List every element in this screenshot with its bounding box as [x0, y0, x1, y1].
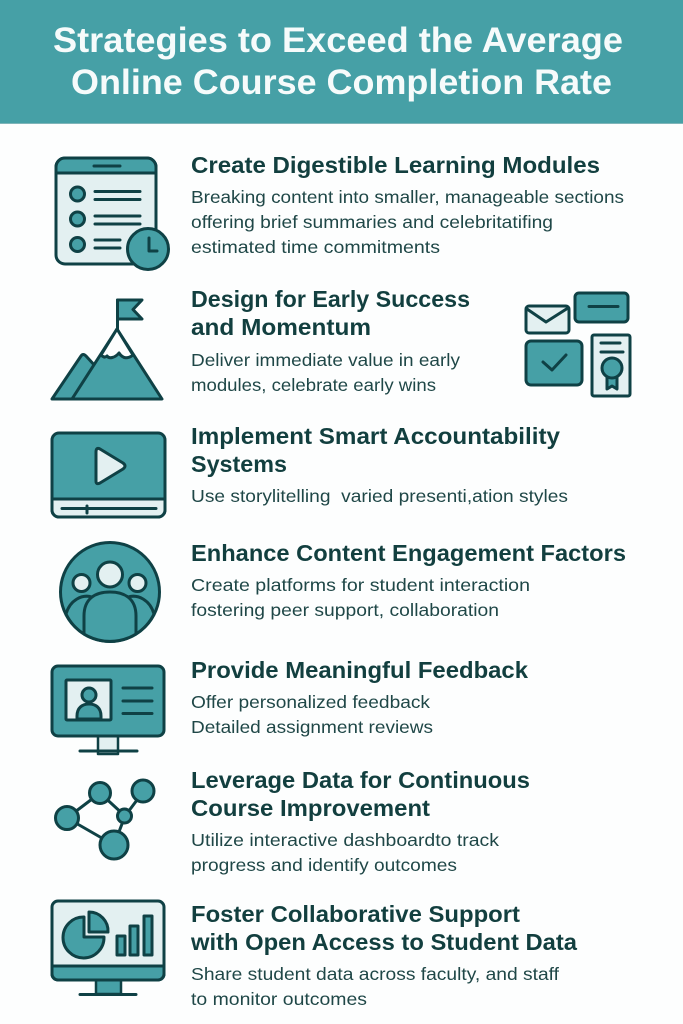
heading and text: collaborative support: Foster Collaborative Support: [191, 901, 520, 927]
heading and text: collaborative support: [190, 901, 577, 1009]
heading and text: feedback: Provide Meaningful Feedback: [191, 657, 528, 683]
icon: monitor with profile: [52, 666, 164, 754]
title banner: [0, 0, 683, 124]
heading and text: digestible modules: estimated time commitments: [191, 237, 440, 257]
heading and text: engagement: [191, 540, 626, 620]
heading and text: feedback: Detailed assignment reviews: [191, 717, 433, 737]
heading and text: engagement: fostering peer support, collaboration: [191, 600, 499, 620]
heading and text: data improvement: Leverage Data for Continuous: [191, 767, 530, 793]
heading and text: data improvement: Utilize interactive dashboardto track: [191, 830, 499, 850]
icon: group of people in circle: [60, 542, 160, 642]
heading and text: early success: Design for Early Success: [191, 286, 470, 312]
heading and text: accountability: Use storylitelling varied presenti,ation styles: [191, 486, 568, 506]
heading and text: early success: [191, 286, 470, 395]
heading and text: accountability: Systems: [191, 451, 287, 477]
icon: analytics dashboard monitor: [52, 901, 164, 994]
icon: connected data nodes: [56, 780, 154, 859]
icon: mountain with flag: [52, 300, 162, 399]
heading and text: digestible modules: offering brief summaries and celebritatifing: [191, 212, 553, 232]
heading and text: digestible modules: Breaking content into smaller, manageable sections: [191, 187, 624, 207]
heading and text: data improvement: Course Improvement: [191, 795, 430, 821]
heading and text: accountability: [191, 423, 568, 506]
heading and text: engagement: Enhance Content Engagement Factors: [191, 540, 626, 566]
icon: course module window with clock: [56, 158, 168, 270]
heading and text: data improvement: [191, 767, 530, 875]
heading and text: digestible modules: [191, 152, 624, 257]
heading and text: feedback: Offer personalized feedback: [191, 692, 430, 712]
heading and text: feedback: [191, 657, 528, 737]
heading and text: collaborative support: Share student data across faculty, and staff: [191, 964, 559, 984]
icon: email, message, checkmark and certificate cluster: [526, 293, 630, 396]
title banner: Online Course Completion Rate: [71, 63, 612, 102]
heading and text: early success: modules, celebrate early wins: [191, 375, 436, 395]
icon: video player: [52, 433, 165, 517]
heading and text: engagement: Create platforms for student interaction: [191, 575, 530, 595]
heading and text: collaborative support: to monitor outcomes: [191, 989, 367, 1009]
title banner: Strategies to Exceed the Average: [53, 21, 623, 60]
heading and text: accountability: Implement Smart Accountability: [191, 423, 560, 449]
heading and text: early success: Deliver immediate value in early: [191, 350, 460, 370]
heading and text: digestible modules: Create Digestible Learning Modules: [191, 152, 600, 178]
heading and text: collaborative support: with Open Access to Student Data: [190, 929, 577, 955]
heading and text: data improvement: progress and identify outcomes: [191, 855, 457, 875]
heading and text: early success: and Momentum: [191, 314, 371, 340]
